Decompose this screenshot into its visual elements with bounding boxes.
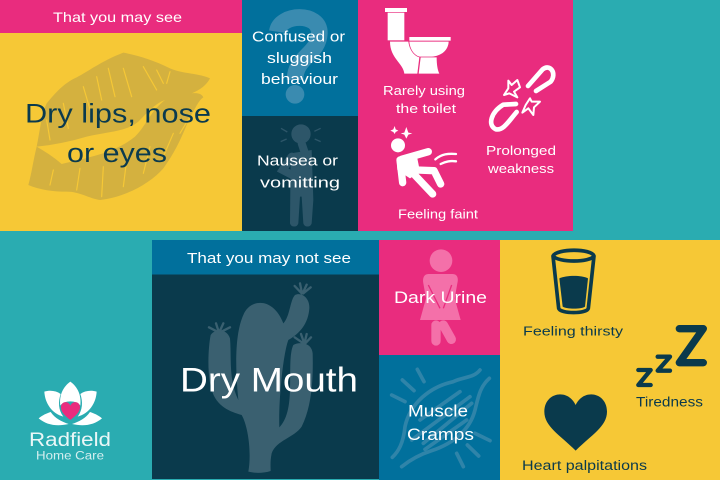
panel: that you may not see header: [152, 240, 379, 274]
logo: Radfield Home Care: Radfield: [29, 430, 111, 451]
panel: dry mouth: [152, 274, 379, 479]
icon: glass of water: [553, 250, 594, 313]
panel: dry lips, nose or eyes: Dry lips, nose: [25, 98, 211, 128]
panel: that you may see header: That you may see: [53, 9, 182, 25]
panel: nausea or vomitting: Nausea or: [257, 152, 338, 170]
panel: confused or sluggish behaviour: behaviour: [261, 71, 338, 88]
panel: muscle cramps: Cramps: [407, 426, 474, 444]
panel: pink symptoms: Prolonged: [486, 143, 556, 158]
panel: yellow symptoms: Tiredness: [636, 394, 703, 410]
panel: confused or sluggish behaviour: [242, 0, 358, 116]
panel: that you may not see header: That you may not see: [187, 251, 351, 267]
icon: heart: [544, 394, 607, 451]
panel: yellow symptoms: [500, 240, 720, 480]
panel: dark urine: [379, 240, 500, 355]
icon: question mark: [277, 17, 319, 104]
panel: nausea or vomitting: [242, 116, 358, 231]
panel: yellow symptoms: Feeling thirsty: [523, 324, 624, 338]
icon: fainting figure: [390, 126, 456, 194]
panel: dry lips, nose or eyes: [0, 33, 242, 231]
logo: Radfield Home Care: Home Care: [36, 450, 104, 462]
panel: pink symptoms: [358, 0, 573, 231]
panel: muscle cramps: Muscle: [408, 402, 468, 420]
panel: dry mouth: Dry Mouth: [180, 362, 358, 400]
icon: lotus with heart: [39, 382, 102, 425]
panel: nausea or vomitting: vomitting: [260, 174, 340, 192]
panel: yellow symptoms: Heart palpitations: [522, 458, 647, 473]
panel: confused or sluggish behaviour: Confused or: [252, 28, 345, 46]
panel: that you may see header: [0, 0, 242, 33]
panel: confused or sluggish behaviour: sluggish: [267, 50, 332, 67]
logo: Radfield Home Care: [29, 382, 111, 462]
icon: woman holding herself: [420, 249, 461, 341]
icon: lips: [28, 53, 210, 200]
panel: dry lips, nose or eyes: or eyes: [67, 138, 167, 168]
icon: broken chain: [491, 68, 553, 129]
panel: pink symptoms: weakness: [487, 161, 555, 176]
panel: pink symptoms: Feeling faint: [398, 206, 478, 222]
icon: muscle: [392, 369, 490, 467]
icon: zzz: [638, 329, 703, 385]
panel: pink symptoms: Rarely using: [383, 83, 465, 98]
panel: dark urine: Dark Urine: [394, 288, 487, 307]
icon: cactus: [208, 283, 313, 473]
icon: nauseous person: [281, 124, 321, 226]
panel: pink symptoms: the toilet: [396, 101, 456, 116]
panel: muscle cramps: [379, 355, 500, 480]
icon: toilet: [385, 8, 451, 74]
